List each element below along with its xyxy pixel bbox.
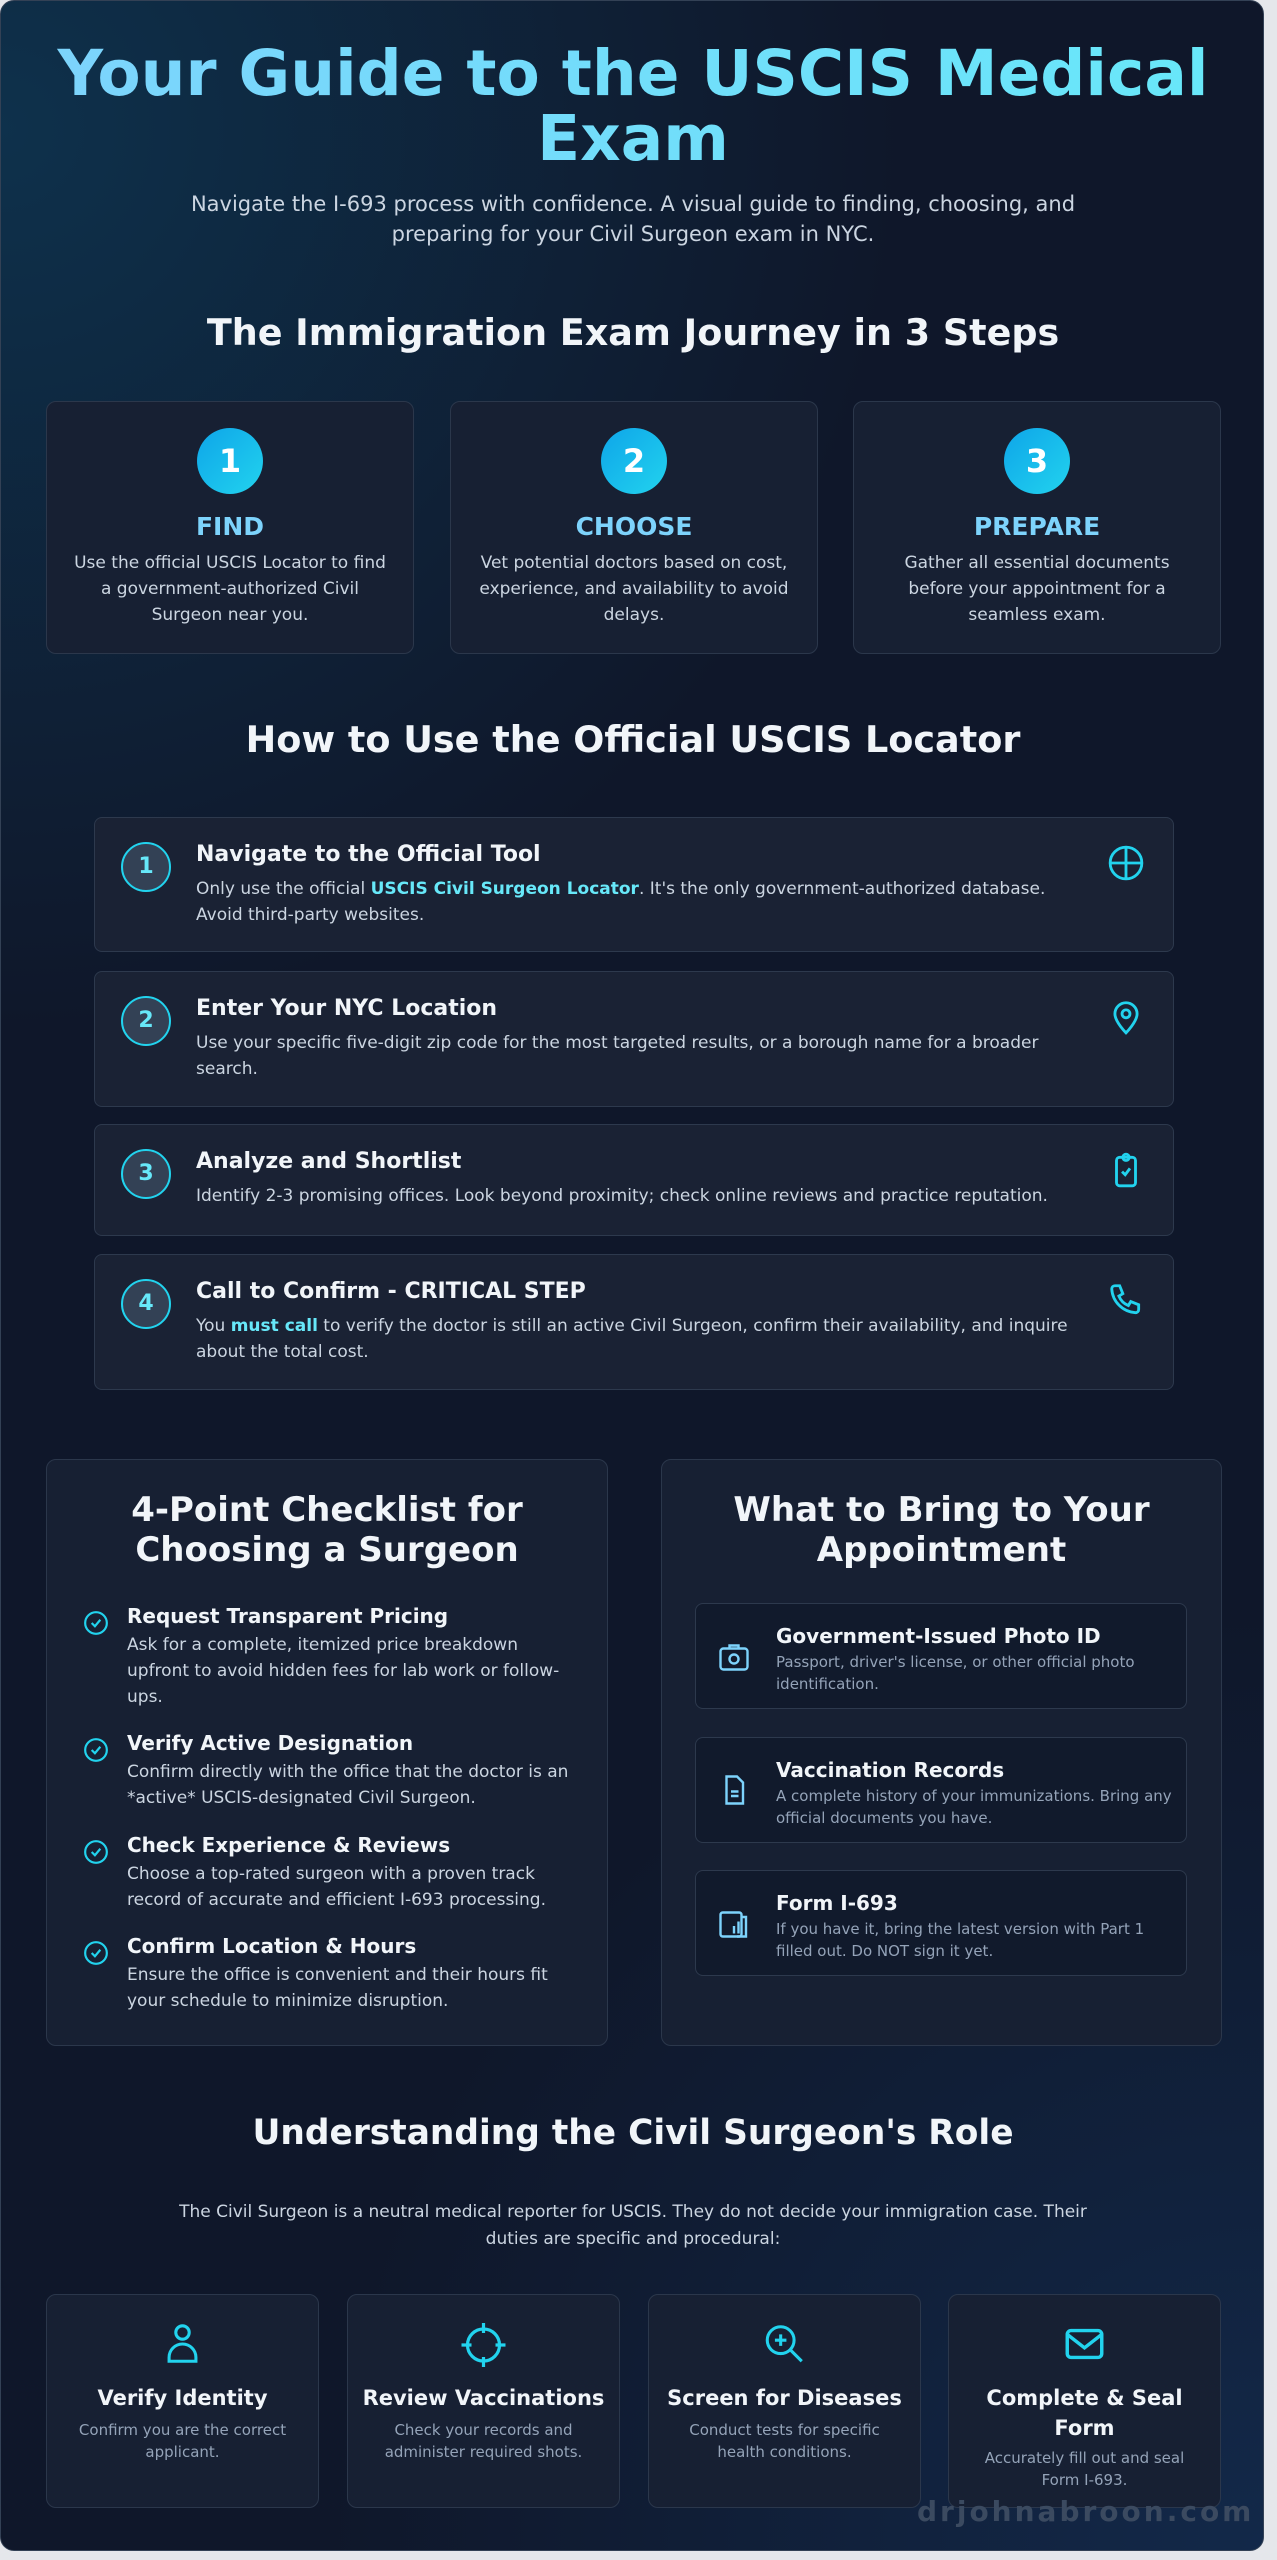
title xyxy=(1,41,1265,171)
icon: number 3 xyxy=(1004,428,1070,494)
item: location: Ensure the office is convenient and their hours fit your schedule to minimize disruption. xyxy=(127,1965,548,2011)
number 4: 4 xyxy=(138,1291,154,1316)
item: form i-693: Form I-693 xyxy=(776,1891,898,1915)
item: designation xyxy=(84,1731,568,1808)
number 1 xyxy=(121,842,171,892)
card: screen diseases: Screen for Diseases xyxy=(667,2386,902,2410)
icon: number 1 xyxy=(197,428,263,494)
step text: Vet potential doctors based on cost, experience, and availability to avoid delays. xyxy=(479,553,789,625)
icon: crosshair xyxy=(462,2323,506,2367)
panel: checklist xyxy=(46,1459,608,2046)
item: pricing xyxy=(84,1604,559,1707)
panel: step 2 choose xyxy=(450,401,818,654)
item: location xyxy=(84,1934,548,2011)
item: pricing: Ask for a complete, itemized price breakdown upfront to avoid hidden fees for lab work or follow-ups. xyxy=(127,1635,559,1707)
card: screen diseases: Conduct tests for specific health conditions. xyxy=(689,2421,880,2461)
number 3 xyxy=(121,1149,171,1199)
panel: what to bring xyxy=(661,1459,1222,2046)
number 2: 2 xyxy=(138,1008,154,1033)
icon: map pin xyxy=(1114,1001,1138,1035)
subtitle: Navigate the I-693 process with confidence. A visual guide to finding, choosing, and preparing for your Civil Surgeon exam in NYC. xyxy=(191,192,1075,246)
item: location: Confirm Location & Hours xyxy=(127,1934,416,1958)
card: verify identity xyxy=(46,2294,319,2508)
step title: PREPARE xyxy=(974,512,1100,541)
panel: step 1 find xyxy=(46,401,414,654)
step text: Identify 2-3 promising offices. Look beyond proximity; check online reviews and practice reputation. xyxy=(196,1186,1048,1206)
number 4 xyxy=(121,1279,171,1329)
icon: number 1: 1 xyxy=(219,442,241,480)
number 3: 3 xyxy=(138,1161,154,1186)
panel title: 4-Point Checklist for xyxy=(131,1490,523,1530)
item: designation: Confirm directly with the office that the doctor is an *active* USCIS-designated Civil Surgeon. xyxy=(127,1762,568,1808)
item: experience xyxy=(84,1833,546,1910)
card: review vaccinations xyxy=(347,2294,620,2508)
panel: step 3 prepare xyxy=(853,401,1221,654)
icon: magnifier plus xyxy=(766,2325,803,2362)
item: experience: Check Experience & Reviews xyxy=(127,1833,450,1857)
panel: locator step 3 xyxy=(94,1124,1174,1236)
item: form i-693: If you have it, bring the latest version with Part 1 filled out. Do NOT sign it yet. xyxy=(776,1920,1144,1960)
card: complete form: Accurately fill out and seal Form I-693. xyxy=(985,2449,1184,2489)
item: designation: Verify Active Designation xyxy=(127,1731,413,1755)
item: vaccination records: Vaccination Records xyxy=(776,1758,1004,1782)
number 2 xyxy=(121,996,171,1046)
step title: Call to Confirm - CRITICAL STEP xyxy=(196,1279,586,1304)
icon: clipboard check xyxy=(1115,1152,1137,1188)
step title: Analyze and Shortlist xyxy=(196,1149,461,1174)
card: complete form xyxy=(948,2294,1221,2508)
panel title: Appointment xyxy=(817,1530,1066,1570)
watermark: drjohnabroon.com xyxy=(917,2495,1254,2528)
panel: locator step 2 xyxy=(94,971,1174,1107)
step title: Enter Your NYC Location xyxy=(196,996,497,1021)
heading: 3 steps: The Immigration Exam Journey in 3 Steps xyxy=(207,311,1059,354)
panel title xyxy=(733,1490,1150,1570)
icon: person xyxy=(168,2324,198,2363)
card: screen diseases xyxy=(648,2294,921,2508)
card: complete form: Complete & Seal Form xyxy=(986,2386,1183,2440)
item: photo id: Passport, driver's license, or other official photo identification. xyxy=(776,1653,1135,1693)
icon: phone xyxy=(1110,1284,1140,1314)
step text: You must call to verify the doctor is still an active Civil Surgeon, confirm their availability, and inquire about the total cost. xyxy=(196,1316,1068,1362)
step title: CHOOSE xyxy=(576,512,692,541)
panel title xyxy=(131,1490,523,1570)
step text: Use the official USCIS Locator to find a government-authorized Civil Surgeon near you. xyxy=(74,553,386,625)
step text: Gather all essential documents before your appointment for a seamless exam. xyxy=(904,553,1170,625)
item: photo id: Government-Issued Photo ID xyxy=(776,1624,1101,1648)
title: Your Guide to the USCIS Medical xyxy=(58,37,1208,110)
heading: role: Understanding the Civil Surgeon's Role xyxy=(252,2113,1014,2153)
step title: Navigate to the Official Tool xyxy=(196,842,541,867)
icon: envelope xyxy=(1066,2328,1104,2360)
item: pricing: Request Transparent Pricing xyxy=(127,1604,448,1628)
item: form i-693 xyxy=(695,1870,1187,1976)
icon: number 2 xyxy=(601,428,667,494)
item: vaccination records: A complete history of your immunizations. Bring any official documents you have. xyxy=(776,1787,1172,1827)
heading: locator: How to Use the Official USCIS Locator xyxy=(246,718,1020,761)
panel: locator step 4 xyxy=(94,1254,1174,1390)
panel title: What to Bring to Your xyxy=(733,1490,1150,1530)
title: Exam xyxy=(537,102,729,175)
step text: Use your specific five-digit zip code for the most targeted results, or a borough name for a broader search. xyxy=(196,1033,1038,1079)
step title: FIND xyxy=(196,512,264,541)
item: photo id xyxy=(695,1603,1187,1709)
item: experience: Choose a top-rated surgeon with a proven track record of accurate and efficient I-693 processing. xyxy=(127,1864,546,1910)
card: verify identity: Confirm you are the correct applicant. xyxy=(79,2421,286,2461)
step text: Only use the official USCIS Civil Surgeon Locator. It's the only government-authorized database. Avoid third-party websites. xyxy=(196,879,1045,925)
icon: number 2: 2 xyxy=(623,442,645,480)
intro paragraph: The Civil Surgeon is a neutral medical reporter for USCIS. They do not decide your immigration case. Their duties are specific and procedural: xyxy=(179,2202,1087,2249)
icon: number 3: 3 xyxy=(1026,442,1048,480)
panel title: Choosing a Surgeon xyxy=(135,1530,519,1570)
number 1: 1 xyxy=(138,854,154,879)
panel: locator step 1 xyxy=(94,817,1174,952)
icon: globe crosshair xyxy=(1108,846,1144,880)
card: verify identity: Verify Identity xyxy=(97,2386,268,2410)
item: vaccination records xyxy=(695,1737,1187,1843)
card: review vaccinations: Check your records and administer required shots. xyxy=(385,2421,582,2461)
card: review vaccinations: Review Vaccinations xyxy=(363,2386,604,2410)
